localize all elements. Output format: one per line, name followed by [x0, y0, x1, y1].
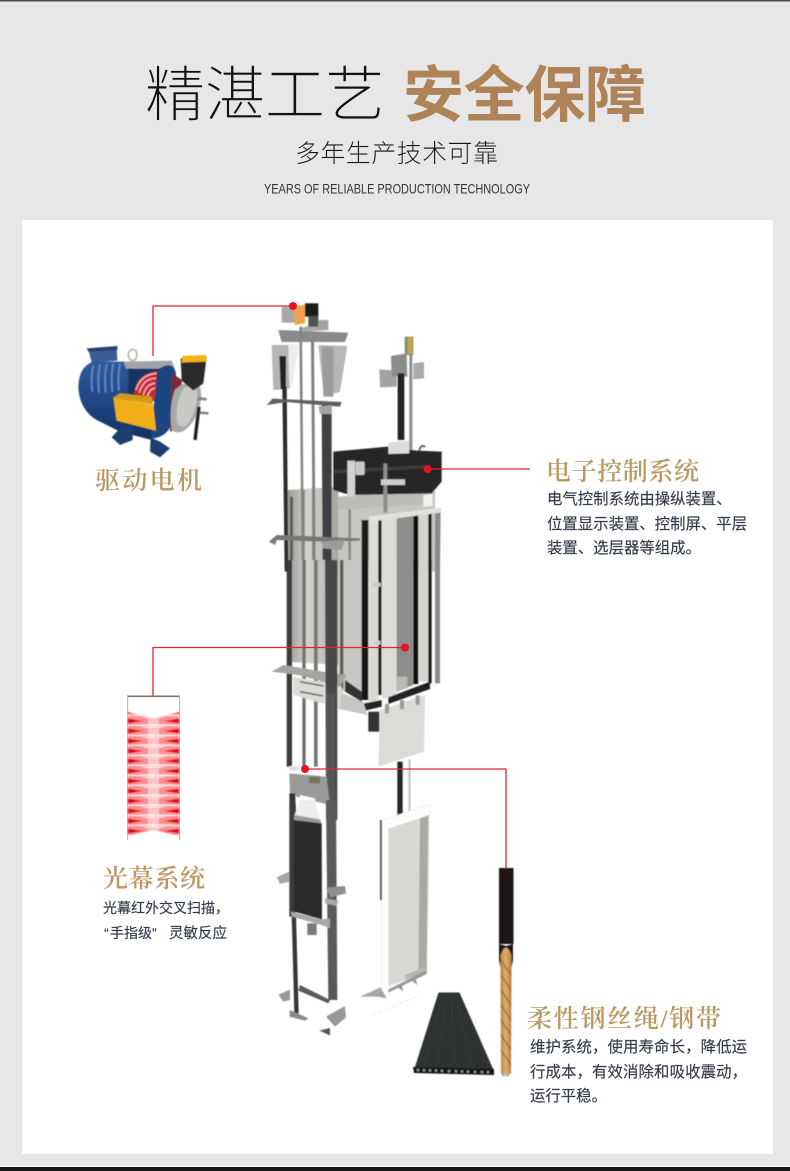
text block: flexible rope and belt: 维护系统，使用寿命长，降低运 [530, 1035, 747, 1057]
callout line: motor [153, 302, 297, 356]
text block: electronic control system: 电气控制系统由操纵装置、 [547, 487, 732, 509]
text block: light curtain system: 光幕红外交叉扫描， [103, 898, 229, 918]
icon: steel cable [499, 868, 514, 1077]
text block: flexible rope and belt: 行成本，有效消除和吸收震动， [530, 1060, 747, 1082]
text block: light curtain system: 手指级 [110, 923, 152, 943]
text block: electronic control system [546, 458, 747, 558]
icon: light curtain [127, 696, 180, 840]
text block: electronic control system: 装置、选层器等组成。 [547, 536, 701, 558]
text block: light curtain system: 光幕系统 [103, 865, 206, 893]
text block: electronic control system: 电子控制系统 [546, 458, 700, 486]
icon: traction motor [78, 346, 208, 457]
text block: light curtain system: “ [104, 925, 109, 941]
callout line: control system [424, 465, 530, 473]
text block: light curtain system: ” [152, 925, 157, 941]
title: 安全保障 [403, 45, 646, 134]
title: 精湛工艺 [145, 47, 385, 134]
middle section of car and plate [272, 560, 440, 820]
panel: main white card [22, 220, 773, 1154]
text block: flexible rope and belt: 运行平稳。 [530, 1084, 607, 1106]
diagram: elevator assembly [267, 303, 442, 1035]
heading: 驱动电机: 驱动电机 [95, 467, 202, 495]
text block: light curtain system: 灵敏反应 [169, 922, 227, 943]
subtitle: 多年生产技术可靠 [295, 134, 498, 170]
top edge line [0, 0, 790, 2]
text block: flexible rope and belt: 柔性钢丝绳/钢带 [527, 1005, 721, 1033]
callout line: steel rope [301, 765, 506, 868]
english subtitle: YEARS OF RELIABLE PRODUCTION TECHNOLOGY [264, 180, 531, 196]
text block: light curtain system [103, 865, 229, 943]
callout line: light curtain [153, 644, 409, 696]
text block: flexible rope and belt [527, 1005, 747, 1106]
upper section of hoistway and car [267, 303, 442, 572]
bottom edge bar [0, 1166, 790, 1171]
lower section: counterweight and landing door [277, 800, 430, 1035]
title [145, 45, 646, 134]
text block: electronic control system: 位置显示装置、控制屏、平层 [547, 512, 747, 534]
icon: steel belt [413, 992, 494, 1075]
